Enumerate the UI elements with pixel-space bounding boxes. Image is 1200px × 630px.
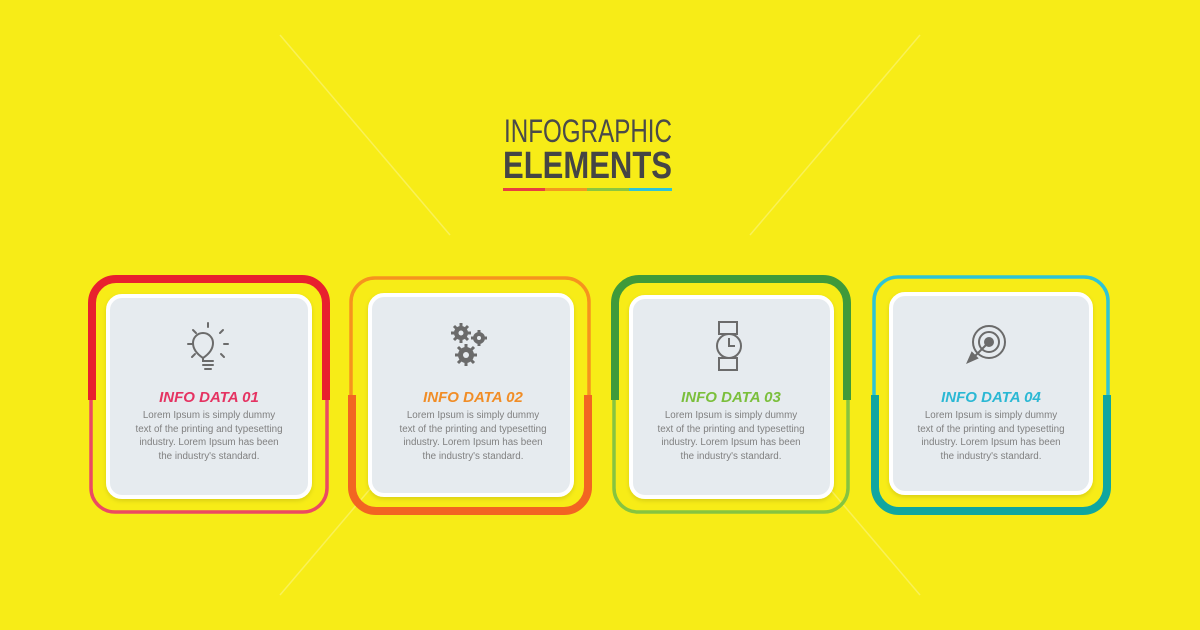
icon: target [968,326,1005,362]
panel: info data 04: INFO DATA 04 [941,389,1042,406]
panel: info data 03: text of the printing and typesetting [657,424,805,435]
panel: info data 01: INFO DATA 01 [159,389,259,406]
panel: info data 04: the industry's standard. [941,451,1041,462]
panel: info data 02: industry. Lorem Ipsum has been [403,437,543,448]
icon: watch [717,322,741,370]
panel: info data 04 [874,277,1108,512]
panel: info data 01: text of the printing and typesetting [135,424,283,435]
icon: light bulb [188,323,228,369]
panel: info data 01 [91,278,327,512]
panel: info data 04: text of the printing and typesetting [917,424,1065,435]
panel: info data 01: Lorem Ipsum is simply dummy [143,410,275,421]
panel: info data 02: Lorem Ipsum is simply dummy [407,410,539,421]
panel: info data 03: INFO DATA 03 [681,389,782,406]
panel: info data 02: the industry's standard. [423,451,523,462]
title: ELEMENTS [503,145,672,187]
icon: gears [451,323,487,366]
panel: info data 03: industry. Lorem Ipsum has been [661,437,801,448]
panel: info data 02 [351,278,589,512]
panel: info data 03: the industry's standard. [681,451,781,462]
panel: info data 04: industry. Lorem Ipsum has been [921,437,1061,448]
panel: info data 03: Lorem Ipsum is simply dummy [665,410,797,421]
panel: info data 01: industry. Lorem Ipsum has been [139,437,279,448]
panel: info data 02: text of the printing and typesetting [399,424,547,435]
title: INFOGRAPHIC [504,113,672,149]
title [503,113,672,191]
panel: info data 01: the industry's standard. [159,451,259,462]
panel: info data 02: INFO DATA 02 [423,389,524,406]
panel: info data 04: Lorem Ipsum is simply dummy [925,410,1057,421]
panel: info data 03 [614,278,848,512]
